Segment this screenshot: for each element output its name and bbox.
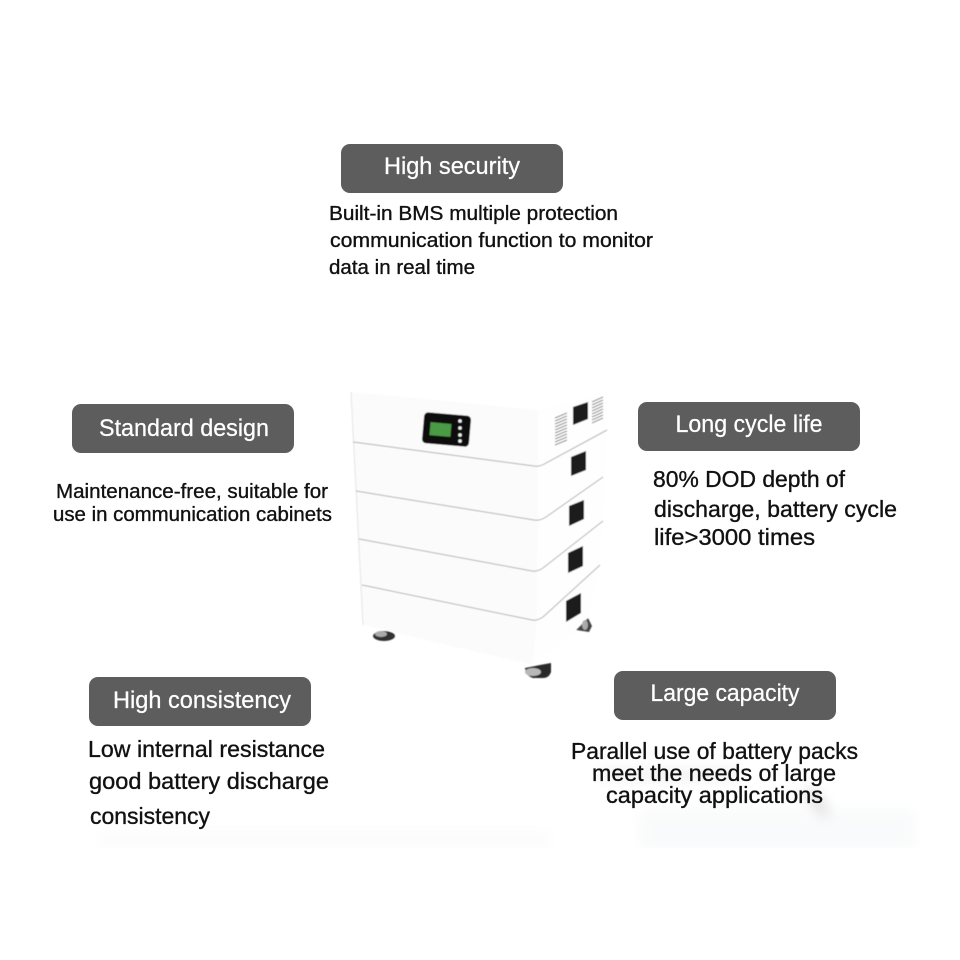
card: Large capacity: Large capacity — [650, 680, 800, 707]
cabinet front face — [351, 392, 540, 665]
green screen — [429, 422, 451, 437]
description — [571, 738, 858, 808]
description: Low internal resistance — [88, 736, 325, 762]
card: High consistency: High consistency — [113, 687, 291, 714]
description — [88, 736, 329, 829]
description: use in communication cabinets — [53, 504, 332, 526]
handles — [566, 402, 588, 622]
description: discharge, battery cycle — [654, 496, 897, 522]
description: Maintenance-free, suitable for — [56, 481, 328, 503]
description: data in real time — [329, 257, 475, 279]
description: communication function to monitor — [330, 230, 653, 252]
buttons — [458, 419, 462, 443]
description: 80% DOD depth of — [653, 466, 846, 492]
side vents — [555, 397, 603, 445]
heading pill — [72, 404, 294, 453]
description: life>3000 times — [654, 524, 815, 550]
heading pill — [89, 677, 311, 726]
battery cabinet — [351, 368, 610, 678]
description: capacity applications — [606, 782, 823, 808]
description — [653, 466, 897, 550]
description: consistency — [90, 803, 210, 829]
card: High security — [329, 144, 653, 279]
description: Built-in BMS multiple protection — [329, 203, 618, 225]
display panel — [422, 412, 471, 447]
description — [53, 481, 332, 526]
card: Large capacity — [571, 671, 858, 808]
cabinet top — [351, 368, 610, 410]
heading pill — [341, 144, 563, 193]
wheels — [373, 618, 592, 678]
cabinet side face — [533, 393, 608, 665]
heading pill — [614, 671, 836, 720]
description: Parallel use of battery packs — [571, 738, 858, 764]
module seams — [353, 430, 607, 620]
card: High consistency — [88, 677, 329, 829]
card: Standard design — [53, 404, 332, 526]
card: Standard design: Standard design — [99, 415, 269, 442]
heading pill — [638, 402, 860, 451]
description: good battery discharge — [89, 768, 329, 794]
left edge shading — [351, 392, 363, 625]
card: Long cycle life: Long cycle life — [676, 411, 822, 438]
card: Long cycle life — [638, 402, 897, 550]
description: meet the needs of large — [592, 760, 836, 786]
description — [329, 203, 653, 279]
faint background floor — [100, 770, 915, 850]
card: High security: High security — [384, 153, 520, 180]
